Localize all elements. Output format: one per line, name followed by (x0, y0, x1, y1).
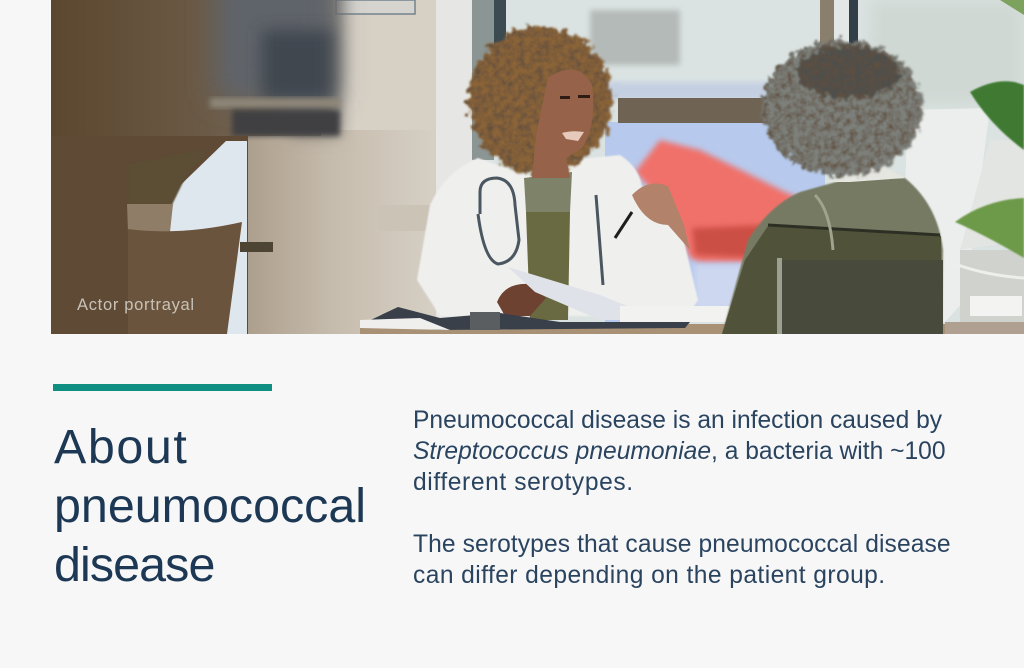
body text: Streptococcus pneumoniae, a bacteria with ~100 (413, 438, 946, 465)
stethoscope (478, 178, 603, 285)
photo: doctor talking with patient, seen through glass (51, 0, 1024, 334)
body text: Pneumococcal disease is an infection caused by (413, 407, 942, 434)
wall background (248, 0, 472, 334)
accent rule (53, 384, 272, 391)
body text (413, 407, 951, 589)
heading: pneumococcal (54, 479, 366, 533)
patient: collar (826, 167, 905, 182)
doctor: curly hair (468, 26, 612, 174)
laptop (900, 108, 1024, 334)
doctor: face and neck (532, 69, 593, 178)
patient: grey curly hair (762, 40, 922, 176)
doctor: hands with pen and paper (497, 183, 690, 320)
window with blurred street (472, 0, 1024, 334)
desk with papers (360, 306, 945, 334)
body text: different serotypes. (413, 469, 634, 496)
caption: Actor portrayal: Actor portrayal (77, 296, 195, 314)
body text: The serotypes that cause pneumococcal disease (413, 531, 951, 558)
heading: About (54, 420, 188, 474)
heading (54, 420, 366, 592)
body text: can differ depending on the patient group. (413, 562, 886, 589)
blurred dark foreground shape (51, 0, 340, 334)
bright window patch with plant, pot and chair (127, 141, 273, 334)
doctor: olive shirt (524, 172, 572, 320)
doctor: white coat (417, 155, 698, 316)
heading: disease (54, 538, 214, 592)
patient: sweater (722, 178, 943, 334)
plant leaves (955, 0, 1024, 258)
patient: lower sweater band and reflections (722, 195, 943, 334)
